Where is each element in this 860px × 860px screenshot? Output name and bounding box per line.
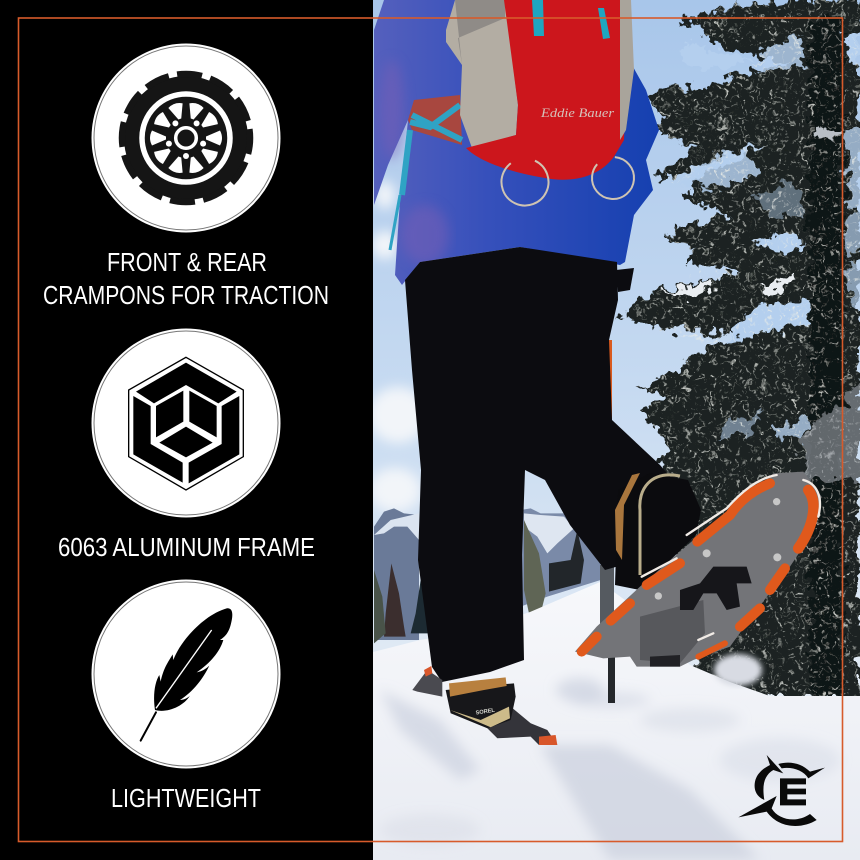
icon: feather bbox=[141, 608, 232, 741]
trekking pole bbox=[600, 340, 615, 703]
raised boot bbox=[615, 473, 701, 590]
snow shadows bbox=[380, 678, 840, 860]
snowshoe binding bbox=[680, 567, 752, 610]
icon: wheel rim bbox=[142, 94, 230, 182]
icon: tire tread bbox=[114, 66, 258, 210]
background panel: black left column bbox=[0, 0, 373, 860]
sky gaps through branches bbox=[680, 33, 860, 443]
snowshoe raised bbox=[575, 472, 822, 667]
hiker jacket bbox=[374, 0, 659, 285]
feature 2 label: 6063 ALUMINUM FRAME bbox=[58, 532, 315, 562]
feature 3 label: LIGHTWEIGHT bbox=[111, 783, 261, 813]
planted snowshoe bbox=[412, 670, 442, 697]
clouds bbox=[373, 176, 420, 514]
snowshoe deck bbox=[575, 472, 822, 667]
backpack grey pouch bbox=[446, 0, 518, 148]
snow clumps bbox=[663, 128, 860, 480]
hiker pants bbox=[405, 247, 690, 682]
carabiner rings bbox=[500, 156, 635, 207]
snow ground bbox=[373, 582, 860, 860]
boot brand: SOREL bbox=[475, 708, 496, 717]
boot bbox=[446, 683, 516, 728]
distant pine trees bbox=[374, 520, 584, 643]
photo: snowshoer on mountain bbox=[368, 0, 860, 860]
logo: E emblem bbox=[738, 755, 825, 826]
sky bbox=[373, 0, 860, 700]
backpack side strap bbox=[620, 0, 634, 140]
snow speckle on branches bbox=[620, 0, 860, 700]
planted boot and snowshoe bbox=[412, 666, 557, 745]
feature 1 label: CRAMPONS FOR TRACTION bbox=[43, 280, 329, 310]
tree foliage bbox=[620, 0, 860, 700]
feature 1 label bbox=[43, 247, 329, 310]
snow mound at tree base bbox=[714, 654, 762, 686]
snowshoe snow rim bbox=[642, 475, 820, 640]
feature 3: feather badge bbox=[92, 580, 280, 768]
mountains bbox=[374, 508, 601, 640]
snowshoe bolts bbox=[655, 498, 781, 600]
backpack red body bbox=[466, 0, 626, 180]
tree with snowy branches bbox=[620, 0, 860, 700]
backpack turquoise tabs bbox=[532, 0, 610, 39]
feature 1 label: FRONT & REAR bbox=[107, 247, 267, 277]
backpack logo: Eddie Bauer bbox=[540, 105, 615, 120]
hip strap bbox=[390, 95, 462, 250]
icon: hexagonal cube bbox=[129, 357, 243, 490]
feature 2: aluminum frame hexagon badge bbox=[92, 328, 280, 518]
tree trunk bbox=[810, 20, 843, 700]
snowshoe heel plate bbox=[640, 600, 705, 663]
jacket mottling bbox=[380, 60, 449, 265]
feature 1: tire icon badge bbox=[92, 44, 280, 232]
snowshoe orange frame bbox=[582, 483, 814, 657]
